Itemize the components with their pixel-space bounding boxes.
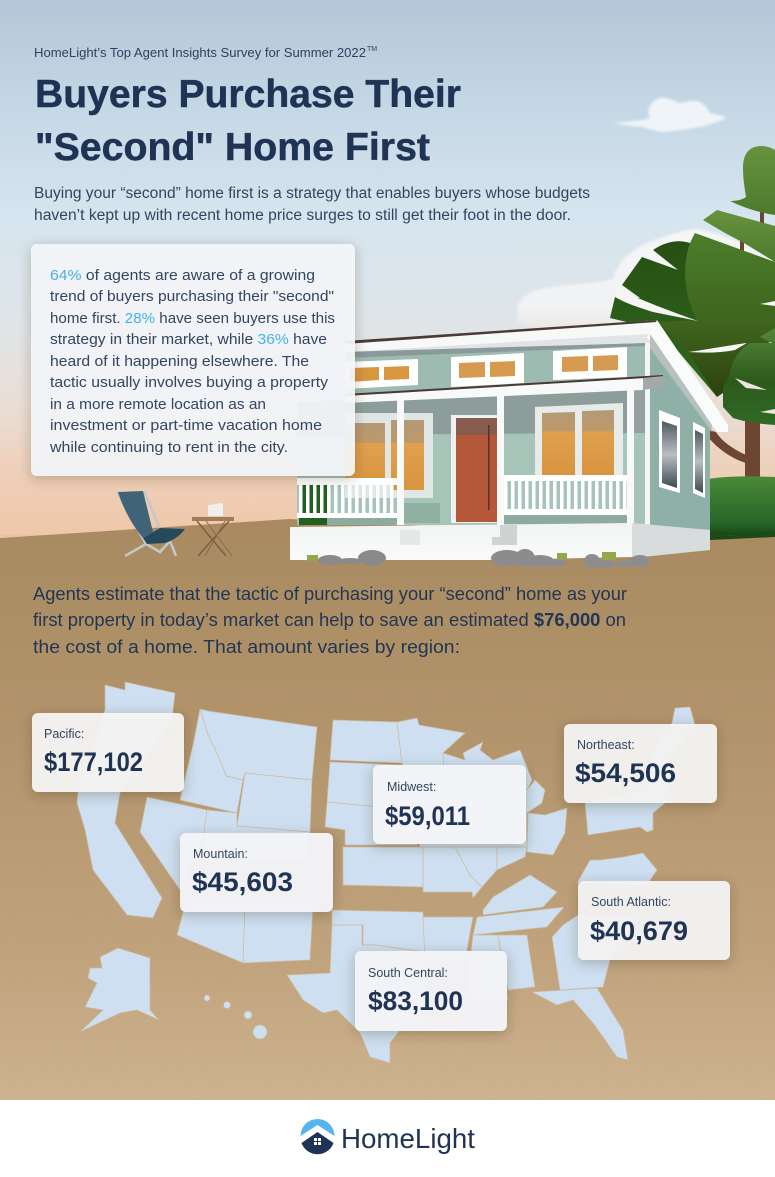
savings line 1: Agents estimate that the tactic of purchasing your “second” home as your — [33, 583, 627, 604]
side wall — [650, 345, 710, 533]
chair back — [118, 491, 153, 538]
US map — [77, 682, 695, 1063]
side window rear — [693, 422, 705, 498]
card text: 64% of agents are aware of a growing — [50, 267, 315, 284]
porch inner wall column upper — [634, 389, 645, 433]
right window frame — [535, 403, 623, 476]
footer — [0, 1100, 775, 1177]
clerestory window 1 panes — [350, 366, 409, 382]
foliage: main tier — [658, 233, 775, 397]
intro text — [34, 185, 590, 224]
foundation side — [632, 523, 710, 558]
roof shadow — [345, 343, 647, 358]
foliage: left dark tier — [610, 241, 740, 397]
card: Northeast: $54,506 — [575, 758, 676, 788]
card: South Atlantic — [578, 881, 730, 960]
wordmark: HomeLight — [341, 1123, 475, 1154]
card: Pacific: $177,102 — [44, 747, 143, 777]
branches — [648, 205, 764, 312]
card text: heard of it happening elsewhere. The — [50, 353, 309, 370]
foliage: lower right tier — [723, 328, 775, 425]
lower front wall — [297, 388, 634, 525]
grass tufts — [307, 552, 616, 561]
right window panes — [542, 410, 614, 475]
trademark: TM — [367, 46, 377, 53]
clerestory window 3 — [553, 347, 627, 380]
center rocks — [491, 549, 566, 567]
card text — [49, 267, 335, 456]
Alaska — [80, 948, 159, 1032]
house — [290, 320, 728, 568]
right railing balusters — [504, 480, 627, 510]
survey label: HomeLight’s Top Agent Insights Survey for Summer 2022 — [34, 45, 366, 60]
panel: survey findings — [31, 244, 355, 476]
card background — [31, 244, 355, 476]
left window frame — [345, 413, 433, 498]
card: South Atlantic: $40,679 — [590, 916, 688, 946]
left steps — [400, 530, 420, 545]
porch shadow on wall — [297, 388, 634, 435]
logo window — [314, 1138, 321, 1145]
card: South Central — [355, 951, 507, 1031]
savings line 2: first property in today’s market can help to save an estimated $76,000 on — [33, 609, 626, 630]
lower siding — [403, 503, 440, 523]
foliage: top tier — [730, 146, 775, 215]
card: Northeast — [564, 724, 717, 803]
South Atlantic states — [532, 853, 657, 1060]
sand grain texture — [0, 535, 775, 1100]
title line 2: "Second" Home First — [35, 126, 430, 169]
card text: home first. 28% have seen buyers use this — [50, 310, 335, 327]
porch roof edge — [345, 375, 663, 396]
door shadow — [456, 418, 497, 435]
card text: while continuing to rent in the city. — [49, 439, 288, 456]
South Central states — [287, 875, 564, 1063]
foundation front — [290, 523, 632, 560]
table top — [192, 517, 234, 521]
tree — [610, 146, 775, 478]
chair frame — [117, 491, 176, 556]
cloud: upper right — [613, 98, 727, 132]
title — [35, 73, 461, 169]
savings text — [33, 583, 627, 657]
card: South Central: $83,100 — [368, 986, 463, 1016]
right rocks — [584, 554, 650, 568]
side window rear glass — [695, 430, 703, 493]
card: Mountain: $45,603 — [192, 867, 293, 897]
columns — [397, 383, 634, 525]
card: Mountain: Mountain: — [193, 847, 248, 861]
lawn chair — [117, 491, 185, 556]
clerestory window 3 panes — [562, 355, 618, 372]
card: Midwest: $59,011 — [385, 801, 470, 831]
icon: HomeLight logo — [300, 1119, 334, 1154]
card: Midwest — [373, 765, 526, 844]
card text: strategy in their market, while 36% have — [50, 331, 327, 348]
side window front — [659, 410, 680, 493]
main roof edge — [345, 320, 657, 344]
door handle — [488, 425, 490, 510]
left window panes — [345, 420, 424, 490]
card text: trend of buyers purchasing their "second" — [50, 288, 334, 305]
Hawaii — [204, 995, 267, 1039]
card: South Central: South Central: — [368, 966, 448, 980]
clerestory window 1 — [345, 359, 418, 389]
sky background — [0, 0, 775, 540]
door frame — [451, 415, 497, 523]
intro line 1: Buying your “second” home first is a strategy that enables buyers whose budgets — [34, 185, 590, 202]
card: Mountain — [180, 833, 333, 912]
left railing rails — [297, 478, 397, 518]
logo sky — [300, 1119, 334, 1136]
card: Northeast: Northeast: — [577, 738, 635, 752]
title line 1: Buyers Purchase Their — [35, 73, 461, 116]
card: Pacific: Pacific: — [44, 727, 84, 741]
side table — [192, 503, 234, 556]
upper front wall — [345, 343, 647, 396]
porch beam end — [643, 376, 664, 390]
main roof fascia — [345, 320, 657, 352]
roof slope shadow — [650, 334, 712, 432]
card: Midwest: Midwest: — [387, 780, 436, 794]
left railing balusters — [299, 484, 397, 514]
card text: tactic usually involves buying a property — [50, 374, 328, 391]
white foliage gaps lower — [735, 378, 775, 414]
tree trunk — [708, 420, 760, 478]
white trim strip — [645, 343, 650, 531]
card: Pacific — [32, 713, 184, 792]
porch inner wall column lower — [634, 433, 645, 531]
mug — [208, 503, 223, 516]
ground — [0, 519, 775, 1100]
chair seat — [143, 528, 185, 544]
table legs — [197, 521, 229, 556]
white foliage gaps — [615, 288, 775, 353]
logo house — [302, 1132, 334, 1154]
right railing lower panel — [504, 515, 627, 524]
hedge — [708, 476, 775, 541]
roof slope — [647, 320, 728, 432]
clerestory window 2 — [451, 353, 524, 387]
door — [456, 418, 497, 522]
Northeast states — [585, 707, 695, 835]
left railing lower panel — [327, 518, 397, 525]
left rocks — [318, 550, 386, 566]
card text: in a more remote location as an — [50, 396, 266, 413]
card text: investment or part-time vacation home — [50, 417, 322, 434]
Mountain states — [140, 709, 317, 963]
Midwest states — [325, 718, 567, 898]
intro line 2: haven’t kept up with recent home price surges to still get their foot in the door. — [34, 207, 571, 224]
card: South Atlantic: South Atlantic: — [591, 895, 671, 909]
side window front glass — [662, 421, 677, 488]
front steps — [492, 525, 517, 545]
Pacific states — [77, 682, 175, 918]
right railing rails — [504, 475, 627, 515]
savings line 3: the cost of a home. That amount varies by region: — [33, 636, 460, 657]
cloud: behind tree — [517, 229, 775, 340]
foliage: second tier — [703, 210, 775, 262]
left railing opening — [299, 482, 327, 525]
clerestory window 2 panes — [459, 361, 515, 378]
porch beam — [345, 378, 643, 403]
